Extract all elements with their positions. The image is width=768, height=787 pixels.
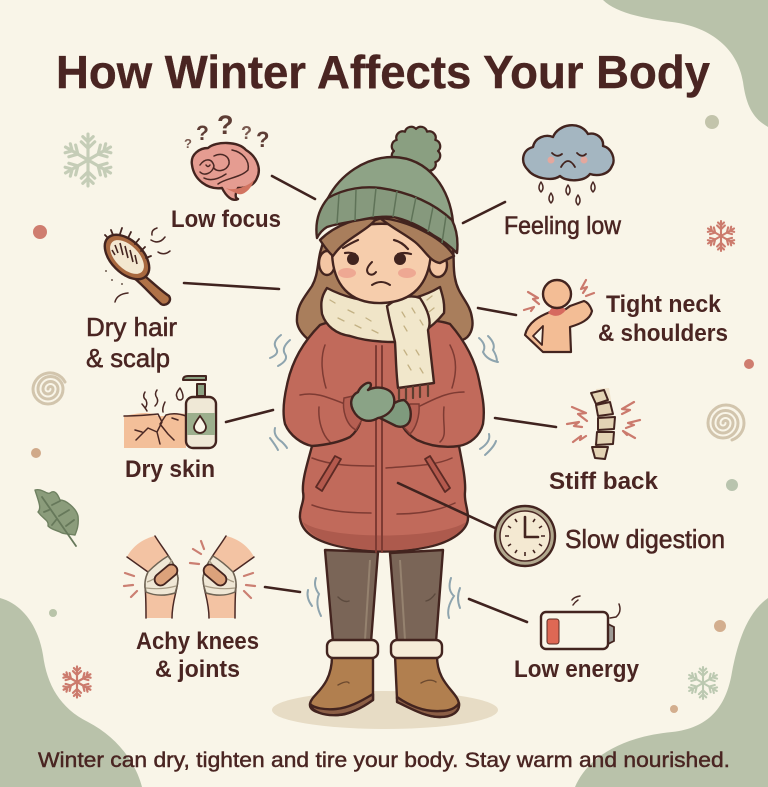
label: dry hair and scalp: & scalp: [86, 343, 170, 373]
corner blob: bottom left: [0, 598, 142, 787]
hat band: [316, 187, 457, 253]
decoration: leaf: [35, 490, 78, 546]
icon: bandaged knees: [124, 536, 255, 618]
label: stiff back: Stiff back: [549, 468, 659, 495]
label: slow digestion: Slow digestion: [565, 524, 725, 554]
label: feeling low: Feeling low: [504, 212, 622, 240]
character: bundled-up girl: [284, 127, 484, 717]
icon: brain with question marks: [184, 110, 269, 200]
connector: low focus: [272, 176, 315, 199]
legs: [325, 550, 443, 642]
decoration: right spiral: [708, 405, 744, 440]
label: achy knees and joints: Achy knees: [136, 628, 259, 655]
question marks: [184, 110, 269, 152]
connector: achy knees: [265, 587, 300, 592]
sleeve cuffs: [344, 396, 419, 434]
label: tight neck and shoulders: Tight neck: [606, 291, 722, 318]
face features: [338, 240, 416, 285]
right knee: [201, 536, 254, 618]
icon: low battery: [541, 596, 620, 649]
hat dome: [328, 157, 453, 222]
decoration: green dot right: [726, 479, 738, 491]
decoration: red snowflake right: [706, 221, 736, 251]
icon: cracked skin and lotion: [124, 376, 216, 448]
connector: tight neck: [478, 308, 516, 315]
mittens: [351, 383, 411, 427]
decoration: left spiral: [33, 373, 65, 404]
decoration: top right dot: [705, 115, 719, 129]
coat sleeves front: [312, 423, 459, 447]
ground shadow: [272, 691, 498, 729]
decoration: tan dot right: [714, 620, 726, 632]
coat hem shade: [303, 522, 466, 550]
coat body: [284, 318, 484, 552]
face: [332, 224, 431, 303]
footer message: Winter can dry, tighten and tire your body. Stay warm and nourished.: [38, 749, 730, 772]
label: low energy: Low energy: [514, 656, 640, 683]
connector: stiff back: [495, 418, 556, 427]
connector: slow digestion: [398, 483, 495, 528]
decoration: green dot: [49, 609, 57, 617]
icon: spine with pain sparks: [567, 388, 640, 459]
hair fringe: [320, 218, 454, 263]
left knee: [127, 536, 180, 618]
decoration: red snowflake bottom left: [62, 666, 92, 698]
boot cuffs: [327, 640, 442, 658]
decoration: tan dot: [31, 448, 41, 458]
decoration: red dot: [33, 225, 47, 239]
connector: dry hair: [184, 283, 279, 289]
connector: low energy: [469, 599, 527, 622]
connector: dry skin: [226, 410, 273, 422]
coat details: [300, 345, 464, 552]
ears: [319, 251, 447, 277]
icon: sad rain cloud: [523, 125, 614, 205]
decoration: red dot right: [744, 359, 754, 369]
coat pockets: [316, 456, 450, 492]
question marks: ?: [217, 110, 234, 140]
question marks: ?: [184, 136, 192, 151]
scarf wrap: [321, 287, 444, 342]
question marks: ?: [256, 127, 269, 152]
scarf tail: [330, 296, 434, 399]
pain ticks: [124, 541, 255, 598]
title: How Winter Affects Your Body: [56, 46, 710, 98]
label: dry skin: Dry skin: [125, 456, 215, 483]
decoration: small tan dot: [670, 705, 678, 713]
question marks: ?: [241, 123, 252, 143]
label: low focus: Low focus: [171, 206, 281, 233]
decoration: green snowflake: [62, 134, 114, 186]
pom-pom: [392, 127, 440, 175]
icon: clock: [495, 506, 555, 566]
label: achy knees and joints: & joints: [155, 656, 240, 683]
corner blob: bottom right: [575, 598, 768, 787]
label: tight neck and shoulders: [598, 291, 728, 347]
label: tight neck and shoulders: & shoulders: [598, 320, 728, 347]
decoration: green snowflake bottom right: [687, 667, 719, 699]
connector: feeling low: [463, 202, 505, 223]
hair back: [297, 215, 473, 340]
hat band ribs: [337, 188, 446, 243]
shiver marks: [270, 335, 498, 618]
icon: hair brush: [97, 227, 170, 305]
question marks: ?: [196, 122, 209, 145]
label: achy knees and joints: [136, 628, 259, 683]
corner blob: top right: [603, 0, 768, 127]
label: dry hair and scalp: Dry hair: [86, 312, 177, 342]
boots: [310, 656, 459, 717]
label: dry hair and scalp: [86, 312, 177, 373]
icon: person with tight neck: [524, 280, 594, 352]
